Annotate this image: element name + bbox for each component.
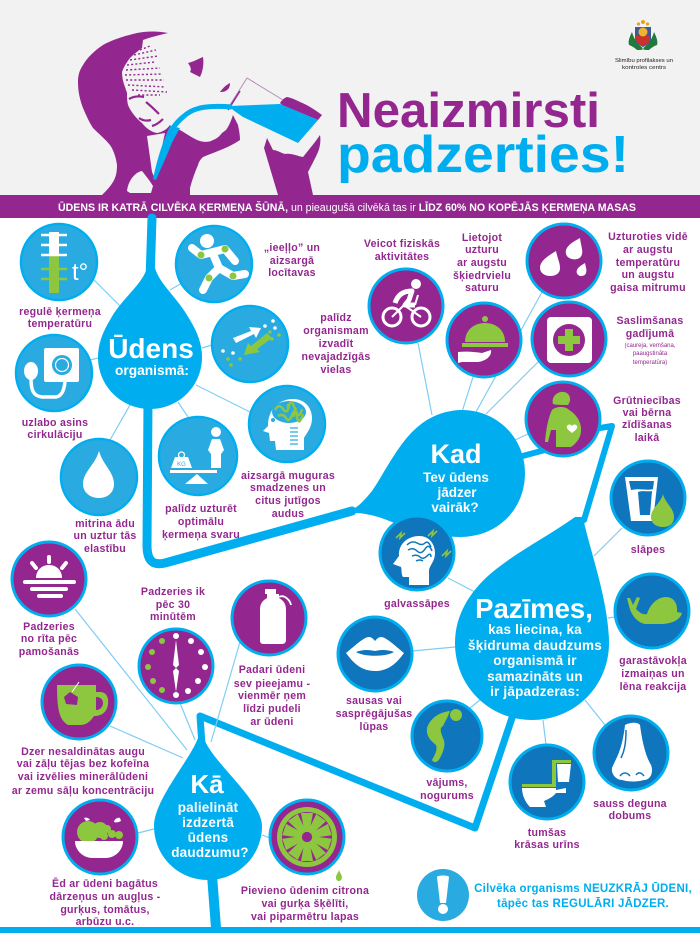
- drop: Pazīmes: organismā ir: [493, 653, 577, 668]
- drop: Kā palielināt izdzertā ūdens daudzumu: izdzertā: [182, 815, 234, 830]
- logo: coat of arms: Slimību profilakses un: [615, 58, 673, 64]
- banner: [0, 195, 700, 218]
- item: augsta temperatūra un mitrums: temperatūru: [616, 257, 680, 269]
- item: saslimšanas gadījumā: gadījumā: [626, 328, 674, 340]
- item: augsta temperatūra un mitrums: ar augstu: [623, 244, 673, 256]
- item: sauss deguna dobums: sauss deguna: [593, 798, 667, 810]
- drop: Kad Tev ūdens jādzer vairāk: jādzer: [436, 485, 477, 500]
- logo: coat of arms: kontroles centrs: [622, 65, 666, 71]
- item: grūtniecība: Grūtniecības: [613, 395, 681, 407]
- item: dārzeņi un augļi: Ēd ar ūdeni bagātus: [52, 878, 158, 890]
- item: vājums, nogurums: [412, 701, 482, 802]
- item: sausas lūpas: lūpas: [360, 721, 388, 733]
- item: dārzeņi un augļi: gurķus, tomātus,: [60, 904, 150, 916]
- item: regulē temperatūru: t°: [72, 259, 88, 286]
- drop: Pazīmes: Pazīmes,: [475, 593, 593, 624]
- drop: Pazīmes: kas liecina, ka: [488, 622, 582, 637]
- item: aizsargā muguras smadzenes: aizsargā muguras: [241, 470, 335, 482]
- callout: neuzkrāj ūdeni: tāpēc tas REGULĀRI JĀDZER.: [497, 898, 669, 910]
- item: padzeries no rīta: [12, 542, 86, 658]
- item: aizsargā muguras smadzenes: smadzenes un: [250, 482, 326, 494]
- item: ieeļļo locītavas: „ieeļļo” un: [264, 242, 320, 254]
- item: slāpes: [611, 461, 685, 556]
- item: augu tējas: vai izvēlies minerālūdeni: [18, 771, 148, 783]
- item: slāpes: slāpes: [631, 544, 665, 556]
- item: pudele līdzi: ar ūdeni: [250, 716, 294, 728]
- item: sausas lūpas: sausas vai: [346, 695, 402, 707]
- item: augsta temperatūra un mitrums: [527, 224, 688, 298]
- logo: coat of arms: [615, 20, 673, 71]
- item: uztur ķermeņa svaru: palīdz uzturēt: [165, 503, 237, 515]
- item: dārzeņi un augļi: dārzeņus un augļus -: [50, 891, 161, 903]
- drop: Kad Tev ūdens jādzer vairāk: Tev ūdens: [423, 470, 489, 485]
- item: tumšas krāsas urīns: krāsas urīns: [514, 839, 580, 851]
- item: tumšas krāsas urīns: tumšas: [528, 827, 566, 839]
- item: garastāvokļa izmaiņas: [615, 574, 689, 693]
- item: augsta temperatūra un mitrums: Uzturoties vidē: [608, 231, 688, 243]
- item: ik pēc 30 minūtēm: Padzeries ik: [141, 586, 205, 598]
- item: augu tējas: vai zāļu tējas bez kofeīna: [17, 758, 149, 770]
- item: ik pēc 30 minūtēm: [139, 586, 213, 703]
- item: regulē temperatūru: regulē ķermeņa: [19, 306, 101, 318]
- item: citrons vai gurķis: [241, 800, 369, 923]
- item: vājums, nogurums: nogurums: [420, 790, 474, 802]
- item: uzlabo asins cirkulāciju: cirkulāciju: [27, 429, 83, 441]
- drop: Kā palielināt izdzertā ūdens daudzumu: [154, 738, 262, 880]
- item: citrons vai gurķis: vai piparmētru lapas: [251, 911, 359, 923]
- item: izvadīt nevajadzīgās vielas: palīdz: [320, 312, 352, 324]
- bottom band: [0, 927, 700, 933]
- item: izvadīt nevajadzīgās vielas: [212, 306, 370, 382]
- item: uzlabo asins cirkulāciju: uzlabo asins: [22, 417, 88, 429]
- item: uzlabo asins cirkulāciju: [16, 335, 92, 441]
- item: augsta temperatūra un mitrums: gaisa mitrumu: [610, 282, 686, 294]
- drop: Ūdens organismā: Ūdens: [108, 333, 194, 364]
- item: ik pēc 30 minūtēm: minūtēm: [150, 611, 196, 623]
- item: tumšas krāsas urīns: [510, 745, 584, 851]
- item: augu tējas: [12, 665, 154, 797]
- item: sauss deguna dobums: [593, 716, 668, 822]
- item: grūtniecība: [526, 382, 681, 456]
- item: pudele līdzi: līdzi pudeli: [243, 703, 301, 715]
- header background: [0, 0, 700, 195]
- item: mitrina ādu: un uztur tās: [73, 530, 137, 542]
- water stream connecting the drops: [147, 218, 612, 928]
- item: mitrina ādu: mitrina ādu: [75, 518, 135, 530]
- drop: Kad Tev ūdens jādzer vairāk: [350, 410, 525, 537]
- item: augu tējas: ar zemu sāļu koncentrāciju: [12, 785, 154, 797]
- item: saslimšanas gadījumā: [532, 302, 683, 376]
- item: uztur ķermeņa svaru: KG: [177, 462, 186, 468]
- item: galvassāpes: galvassāpes: [384, 598, 450, 610]
- drop: Pazīmes: šķidruma daudzums: [468, 638, 602, 653]
- item: dārzeņi un augļi: arbūzu u.c.: [76, 916, 134, 928]
- item: sausas lūpas: sasprēgājušas: [336, 708, 412, 720]
- drop: Pazīmes: samazināts un: [487, 669, 583, 684]
- item: mitrina ādu: elastību: [84, 543, 126, 555]
- drop: Kā palielināt izdzertā ūdens daudzumu: Kā: [190, 769, 224, 799]
- item: regulē temperatūru: temperatūru: [28, 318, 92, 330]
- item: saslimšanas gadījumā: paaugstināta: [633, 351, 668, 357]
- item: grūtniecība: vai bērna: [623, 407, 671, 419]
- item: augu tējas: Dzer nesaldinātas augu: [21, 746, 145, 758]
- item: pudele līdzi: Padari ūdeni: [239, 664, 305, 676]
- drop: Pazīmes: ir jāpadzeras:: [490, 684, 580, 699]
- drop: Kā palielināt izdzertā ūdens daudzumu: daudzumu?: [171, 845, 249, 860]
- item: citrons vai gurķis: Pievieno ūdenim citrona: [241, 885, 369, 897]
- item: saslimšanas gadījumā: (caureja, vemšana,: [624, 343, 676, 349]
- item: grūtniecība: zīdīšanas: [622, 419, 672, 431]
- item: padzeries no rīta: Padzeries: [23, 621, 75, 633]
- item: ik pēc 30 minūtēm: pēc 30: [156, 599, 190, 611]
- item: šķiedrvielu saturs: šķiedrvielu: [453, 270, 511, 282]
- item: aizsargā muguras smadzenes: [241, 386, 335, 520]
- item: aizsargā muguras smadzenes: audus: [272, 508, 304, 520]
- item: saslimšanas gadījumā: Saslimšanas: [617, 315, 683, 327]
- item: garastāvokļa izmaiņas: garastāvokļa: [619, 655, 687, 667]
- item: padzeries no rīta: no rīta pēc: [21, 633, 77, 645]
- drop: Ūdens organismā: [98, 268, 202, 409]
- item: pudele līdzi: sev pieejamu -: [234, 678, 310, 690]
- banner: ŪDENS IR KATRĀ CILVĒKA ĶERMEŅA ŠŪNĀ, un pieaugušā cilvēkā tas ir LĪDZ 60% NO KOPĒJĀS ĶERMEŅA MASAS: [58, 201, 636, 214]
- item: izvadīt nevajadzīgās vielas: nevajadzīgās: [302, 351, 370, 363]
- item: šķiedrvielu saturs: saturu: [465, 282, 499, 294]
- title: [337, 84, 629, 184]
- drop: Kad Tev ūdens jādzer vairāk: Kad: [430, 439, 482, 469]
- illustration: person drinking water: [78, 32, 322, 195]
- item: uztur ķermeņa svaru: ķermeņa svaru: [162, 529, 240, 541]
- item: fiziskās aktivitātes: [364, 238, 443, 343]
- item: saslimšanas gadījumā: temperatūra): [633, 360, 667, 366]
- item: izvadīt nevajadzīgās vielas: organismam: [303, 325, 369, 337]
- item: galvassāpes: [380, 516, 454, 610]
- item: padzeries no rīta: pamošanās: [19, 646, 79, 658]
- drop: Ūdens organismā: organismā:: [115, 362, 189, 378]
- item: ieeļļo locītavas: locītavas: [268, 267, 316, 279]
- title: Neaizmirsti: [337, 84, 600, 138]
- item: grūtniecība: laikā: [635, 432, 659, 444]
- item: garastāvokļa izmaiņas: lēna reakcija: [620, 681, 686, 693]
- item: sauss deguna dobums: dobums: [609, 810, 651, 822]
- drop: Kad Tev ūdens jādzer vairāk: vairāk?: [431, 500, 479, 515]
- item: mitrina ādu: [61, 439, 137, 555]
- item: aizsargā muguras smadzenes: citus jutīgos: [255, 495, 321, 507]
- item: regulē temperatūru: [19, 224, 101, 330]
- item: uztur ķermeņa svaru: optimālu: [178, 516, 224, 528]
- item: uztur ķermeņa svaru: [159, 417, 240, 541]
- callout: neuzkrāj ūdeni: Cilvēka organisms NEUZKRĀJ ŪDENI,: [474, 883, 692, 895]
- item: izvadīt nevajadzīgās vielas: izvadīt: [319, 338, 354, 350]
- item: šķiedrvielu saturs: uzturu: [465, 244, 499, 256]
- item: pudele līdzi: [232, 581, 310, 728]
- connector lines: [75, 279, 622, 838]
- item: šķiedrvielu saturs: Lietojot: [462, 232, 502, 244]
- item: garastāvokļa izmaiņas: izmaiņas un: [621, 668, 685, 680]
- item: fiziskās aktivitātes: Veicot fiziskās: [364, 238, 440, 250]
- item: sausas lūpas: [336, 617, 412, 733]
- item: augsta temperatūra un mitrums: un augstu: [622, 269, 674, 281]
- drop: Kā palielināt izdzertā ūdens daudzumu: ūdens: [188, 830, 228, 845]
- item: ieeļļo locītavas: aizsargā: [270, 255, 314, 267]
- drop: Pazīmes: [455, 517, 609, 720]
- drop: Kā palielināt izdzertā ūdens daudzumu: palielināt: [178, 800, 239, 815]
- item: izvadīt nevajadzīgās vielas: vielas: [321, 364, 351, 376]
- item: citrons vai gurķis: vai gurķa šķēlīti,: [262, 898, 348, 910]
- item: vājums, nogurums: vājums,: [426, 777, 468, 789]
- item: dārzeņi un augļi: [50, 800, 161, 928]
- item: fiziskās aktivitātes: aktivitātes: [375, 251, 429, 263]
- item: šķiedrvielu saturs: [447, 232, 521, 377]
- item: šķiedrvielu saturs: ar augstu: [457, 257, 507, 269]
- item: ieeļļo locītavas: [176, 226, 320, 302]
- item: pudele līdzi: vienmēr ņem: [238, 690, 306, 702]
- callout: neuzkrāj ūdeni: [417, 869, 692, 921]
- title: padzerties!: [337, 126, 629, 184]
